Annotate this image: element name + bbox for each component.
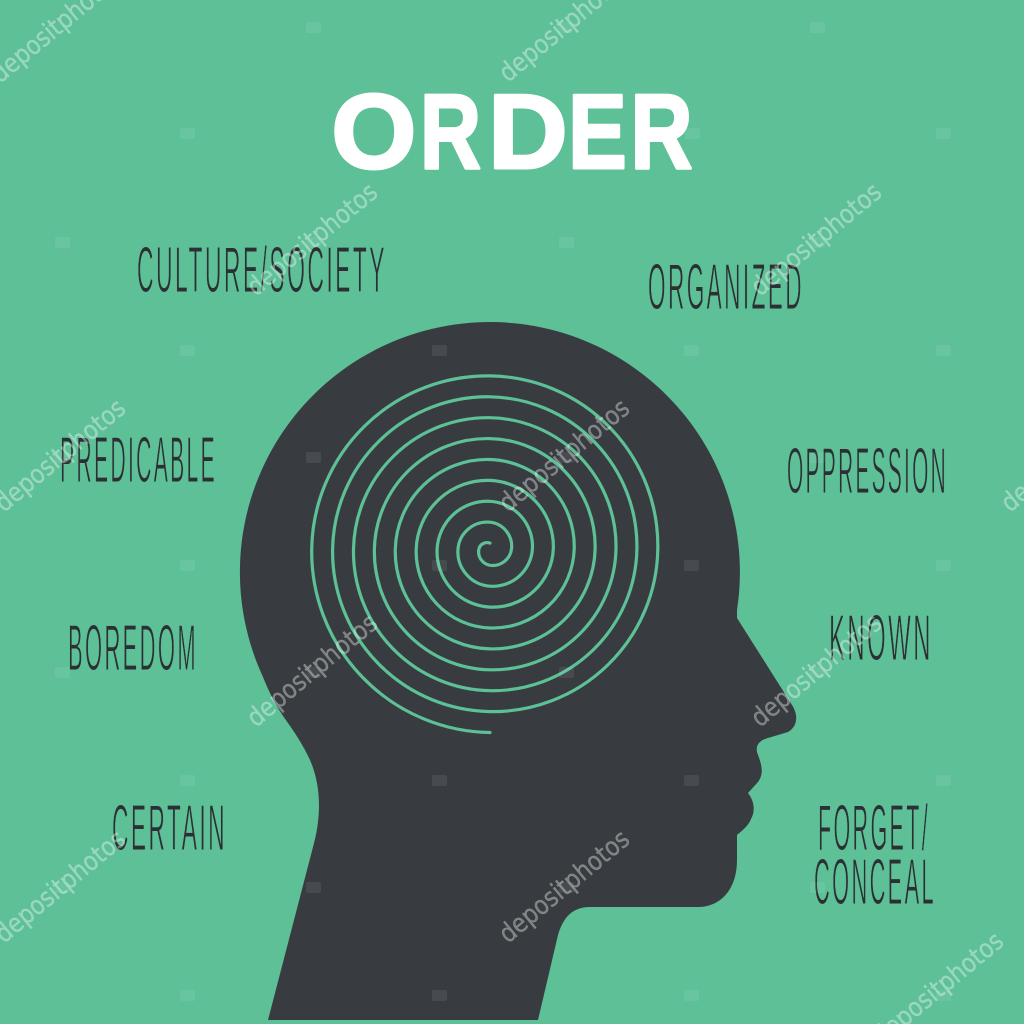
- title: R: [630, 73, 692, 191]
- head silhouette: [240, 322, 796, 1020]
- labels around the head: BOREDOM: [68, 611, 198, 684]
- stock watermarks: depositphotos: [493, 824, 636, 949]
- stock watermarks: depositphotos: [241, 177, 384, 302]
- title: [331, 73, 692, 191]
- title: R: [420, 73, 481, 191]
- stock watermarks: depositphotos: [745, 177, 888, 302]
- title: E: [568, 73, 627, 191]
- labels around the head: PREDICABLE: [60, 423, 217, 496]
- title: O: [331, 73, 416, 191]
- labels around the head: CERTAIN: [112, 791, 227, 864]
- stock watermarks: depositphotos: [241, 608, 384, 733]
- stock watermarks: depositphotos: [745, 608, 888, 733]
- spiral: [312, 376, 658, 732]
- labels around the head: CULTURE/SOCIETY: [137, 233, 387, 306]
- stock watermarks: depositphotos: [493, 393, 636, 518]
- title: D: [488, 73, 568, 191]
- labels around the head: [60, 233, 948, 918]
- label: forget/conceal: [814, 791, 936, 918]
